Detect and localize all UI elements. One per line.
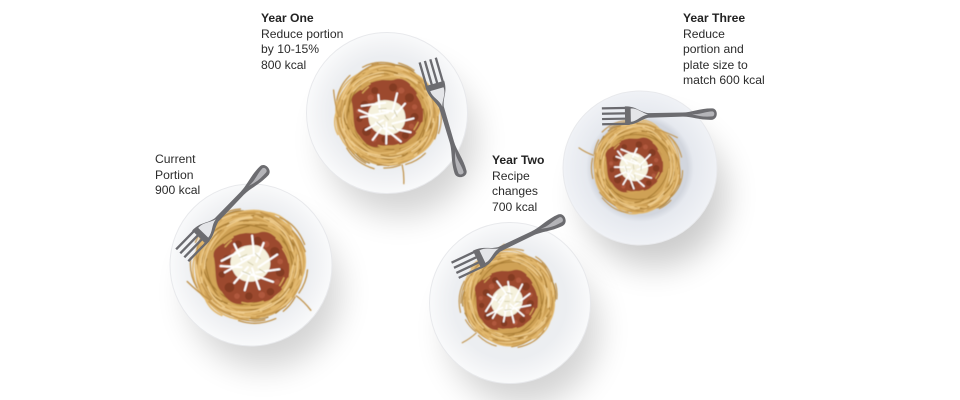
plate: year one	[290, 18, 484, 216]
label: current portion: Current	[155, 152, 195, 166]
label: year three: Reduce	[683, 26, 725, 40]
icon: fork on year two plate	[451, 209, 569, 279]
label: year three: Year Three	[683, 11, 745, 25]
spaghetti: 600 kcal serving	[561, 88, 713, 246]
label: year two: 700 kcal	[492, 200, 537, 214]
icon: fork on year three plate	[602, 105, 717, 125]
label: year three: plate size to	[683, 58, 748, 72]
label: year two: Recipe	[492, 168, 530, 182]
label: year three: portion and	[683, 42, 744, 56]
label: year two: changes	[492, 184, 538, 198]
label: year one: by 10-15%	[261, 42, 319, 56]
plate: year two	[430, 222, 599, 400]
label: current portion: 900 kcal	[155, 183, 200, 197]
spaghetti: 900 kcal serving	[175, 190, 323, 340]
label: year one: Reduce portion	[261, 26, 343, 40]
spaghetti: 800 kcal serving	[290, 18, 484, 212]
icon: fork on current plate	[175, 160, 275, 262]
plate: current portion	[170, 184, 340, 368]
label: current portion	[155, 152, 200, 197]
label: year two	[492, 153, 544, 214]
label: year two: Year Two	[492, 153, 544, 167]
icon: fork on year one plate	[418, 57, 471, 180]
spaghetti: 700 kcal serving	[436, 225, 582, 371]
label: year three	[683, 11, 765, 87]
label: year one: 800 kcal	[261, 58, 306, 72]
label: year three: match 600 kcal	[683, 73, 765, 87]
label: current portion: Portion	[155, 168, 193, 182]
plate: year three	[561, 88, 726, 267]
label: year one: Year One	[261, 11, 314, 25]
label: year one	[261, 11, 343, 72]
